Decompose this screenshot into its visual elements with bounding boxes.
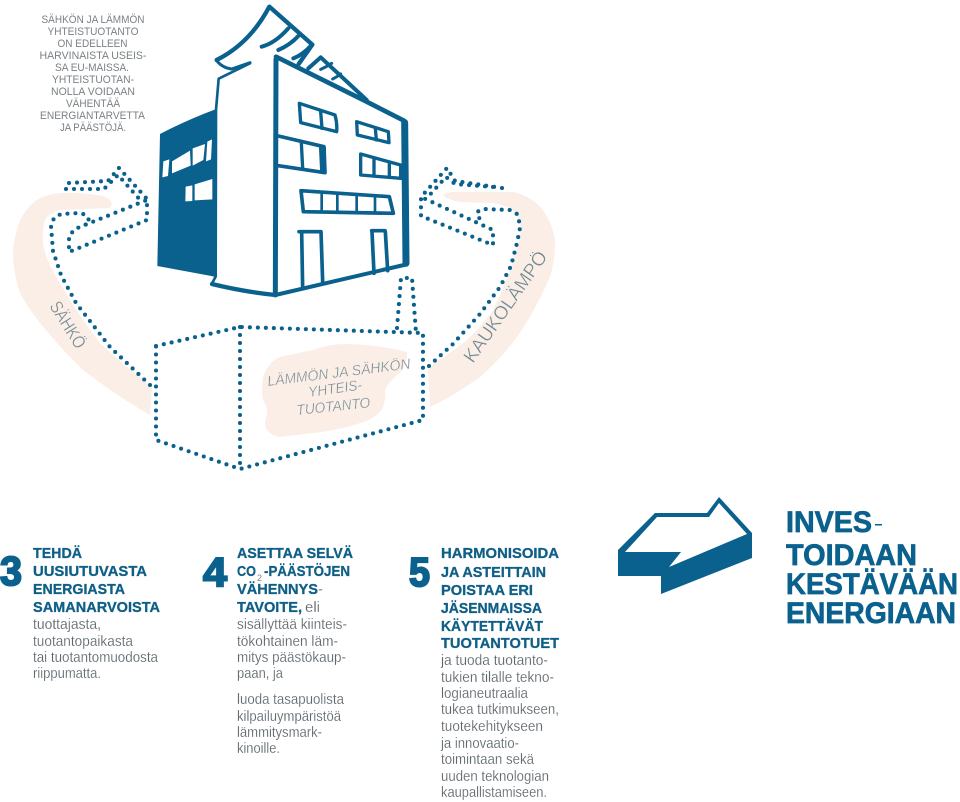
dotted arrow: electricity — [51, 168, 150, 385]
item 5 body: ja innovaatio- — [440, 736, 519, 752]
intro text: YHTEISTUOTAN- — [52, 74, 134, 86]
intro text: SÄHKÖN JA LÄMMÖN — [42, 14, 145, 26]
intro text: ON EDELLEEN — [58, 38, 128, 50]
peach band: district heat — [428, 192, 555, 407]
dotted plant box — [156, 278, 423, 469]
item 3 heading: ENERGIASTA — [33, 582, 126, 598]
building roof — [217, 7, 367, 100]
headline: TOIDAAN — [786, 539, 917, 572]
icon: arrow — [618, 497, 752, 594]
item 4 — [203, 545, 354, 757]
intro text: VÄHENTÄÄ — [66, 98, 121, 110]
item 5 — [409, 546, 560, 801]
item 5 body: logianeutraalia — [441, 686, 529, 702]
item 5 body: tukien tilalle tekno- — [441, 670, 554, 686]
item 5 body: toimintaan sekä — [441, 752, 535, 768]
item 4 heading: 2 — [257, 573, 262, 583]
item 5 heading: JA ASTEITTAIN — [441, 565, 546, 581]
intro text — [40, 14, 147, 134]
label: cogeneration: TUOTANTO — [296, 395, 371, 419]
number 5: 5 — [409, 549, 430, 595]
item 5 body: ja tuoda tuotanto- — [440, 653, 548, 669]
item 5 heading — [441, 546, 560, 652]
item 4 body: sisällyttää kiinteis- — [237, 617, 347, 633]
item 4 heading: VÄHENNYS — [237, 581, 318, 598]
peach band: electricity — [13, 193, 152, 415]
building windows and doors — [278, 103, 401, 289]
building illustration — [157, 7, 406, 295]
number 3: 3 — [0, 548, 22, 594]
item 3 body: tuotantopaikasta — [33, 634, 134, 650]
item 5 body: tukea tutkimukseen, — [441, 702, 559, 718]
item 5 body: kaupallistamiseen. — [441, 785, 547, 801]
building dark side wall — [157, 109, 217, 277]
intro text: ENERGIANTARVETTA — [40, 110, 146, 122]
headline: ENERGIAAN — [786, 597, 956, 630]
headline: INVES — [786, 506, 872, 539]
item 3 heading: SAMANARVOISTA — [33, 600, 161, 616]
item 5 body: uuden teknologian — [441, 769, 549, 785]
item 4 body: paan, ja — [237, 666, 284, 682]
peach blob: cogeneration — [262, 344, 407, 437]
item 5 body: tuotekehitykseen — [441, 719, 543, 735]
label: district heat: KAUKOLÄMPÖ — [460, 248, 552, 367]
item 3 heading: UUSIUTUVASTA — [33, 564, 148, 580]
item 5 body — [440, 653, 559, 801]
item 3 heading: TEHDÄ — [33, 545, 83, 562]
intro text: YHTEISTUOTANTO — [48, 26, 139, 38]
item 4 body — [237, 617, 347, 757]
intro text: JA PÄÄSTÖJÄ. — [60, 122, 126, 134]
item 3 body: riippumatta. — [33, 666, 101, 682]
item 4 body: lämmitysmark- — [237, 725, 322, 741]
label: cogeneration: LÄMMÖN JA SÄHKÖN — [266, 354, 412, 390]
item 4 heading: TAVOITE, — [237, 600, 302, 616]
item 3 — [0, 545, 161, 682]
item 5 heading: KÄYTETTÄVÄT — [441, 618, 543, 635]
intro text: HARVINAISTA USEIS- — [40, 50, 147, 62]
label: cogeneration: YHTEIS- — [307, 378, 363, 401]
dotted arrow: district heat — [421, 168, 520, 366]
item 5 heading: TUOTANTOTUET — [441, 636, 559, 652]
item 5 heading: HARMONISOIDA — [441, 546, 560, 562]
headline — [786, 506, 958, 630]
item 4 body: mitys päästökaup- — [237, 650, 346, 666]
label: cogeneration — [266, 354, 412, 419]
item 4 body: kinoille. — [237, 741, 280, 757]
item 4 heading: ASETTAA SELVÄ — [237, 545, 354, 562]
item 3 body: tai tuotantomuodosta — [33, 650, 159, 666]
label: electricity: SÄHKÖ — [46, 298, 90, 352]
item 3 body — [33, 617, 159, 682]
item 5 heading: JÄSENMAISSA — [441, 600, 543, 617]
item 5 heading: POISTAA ERI — [441, 583, 533, 599]
item 4 heading: eli — [305, 600, 320, 616]
item 3 body: tuottajasta, — [33, 617, 101, 633]
item 4 body: tökohtainen läm- — [237, 634, 338, 650]
item 4 heading: CO — [237, 564, 256, 580]
intro text: NOLLA VOIDAAN — [51, 86, 135, 98]
item 4 body: kilpailuympäristöä — [237, 709, 342, 725]
item 3 heading — [33, 545, 161, 616]
number 4: 4 — [203, 549, 227, 595]
item 4 heading: - — [318, 582, 323, 598]
item 4 heading: -PÄÄSTÖJEN — [264, 563, 350, 580]
item 4 body: luoda tasapuolista — [237, 692, 345, 708]
item 4 heading — [237, 545, 354, 616]
building walls — [212, 57, 406, 295]
intro text: SA EU-MAISSA. — [55, 62, 129, 74]
